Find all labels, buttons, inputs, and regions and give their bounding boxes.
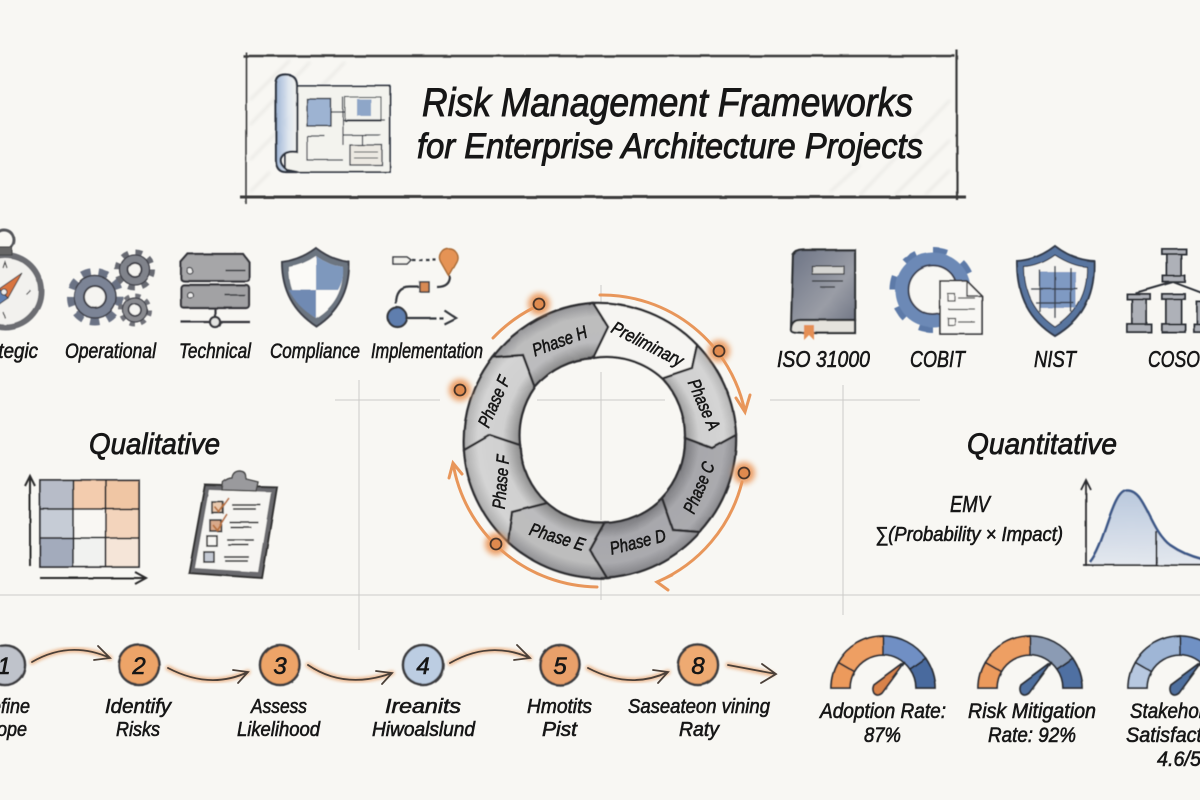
heading: Qualitative: Qualitative [89, 428, 220, 461]
distribution curve [1081, 480, 1200, 566]
gauge labels: Risk Mitigation [968, 700, 1096, 723]
title text [417, 81, 923, 166]
icon: checklist clipboard [189, 471, 277, 578]
step labels: Identify [105, 696, 172, 718]
phase labels: Phase D [608, 525, 668, 559]
orange cycle arrows [449, 295, 750, 590]
step arrows [32, 645, 776, 684]
icon: gears [71, 253, 152, 324]
phase labels: Phase C [679, 458, 719, 516]
gauge labels [818, 700, 1200, 771]
ring segments [464, 303, 736, 578]
gauge labels: Adoption Rate: [818, 700, 946, 723]
EMV formula: ∑(Probability × Impact) [875, 524, 1063, 546]
icon: server [181, 254, 250, 327]
step labels: Saseateon vining [628, 696, 770, 718]
icon: COSO pillars [1127, 249, 1200, 332]
category labels: Compliance [270, 340, 360, 363]
icon: compliance shield [282, 248, 349, 326]
phase labels: Phase E [527, 519, 588, 555]
heading: Quantitative: Quantitative [967, 428, 1117, 461]
step numbers [0, 653, 705, 680]
step labels: Raty [679, 719, 720, 741]
category labels: Implementation [371, 340, 483, 363]
gauge: stakeholder satisfaction [1128, 636, 1200, 695]
icon: ISO 31000 book [791, 250, 855, 340]
phase labels: Phase A [684, 376, 724, 433]
framework labels [777, 346, 1200, 372]
panel: risk categories [0, 230, 483, 363]
icon: blueprint [276, 75, 390, 172]
panel: qualitative methods [25, 428, 277, 584]
step labels: Risks [116, 719, 160, 741]
step labels: Hiwoalslund [372, 719, 476, 741]
gauge: adoption rate [831, 636, 935, 695]
step labels: Assess [250, 696, 307, 718]
step labels: Likelihood [237, 719, 321, 741]
gauge labels: 87% [864, 724, 901, 747]
gauge: risk mitigation rate [978, 636, 1082, 695]
icon: implementation route [388, 249, 458, 326]
step labels: Hmotits [527, 696, 592, 718]
chart: TOGAF ADM phase ring [449, 293, 755, 590]
icon: compass [0, 230, 41, 327]
framework labels: NIST [1034, 346, 1078, 372]
EMV formula [875, 491, 1063, 546]
panel: frameworks [777, 246, 1200, 372]
panel: KPI gauges [818, 636, 1200, 771]
category labels [0, 340, 483, 363]
EMV formula: EMV [950, 491, 992, 517]
step numbers: 2 [131, 653, 146, 680]
step numbers: 5 [553, 653, 567, 680]
step numbers: 3 [273, 653, 287, 680]
step labels: Pist [542, 719, 579, 741]
phase labels: Preliminary [608, 317, 688, 371]
panel: quantitative methods [875, 428, 1200, 566]
icon: COBIT gear and document [895, 252, 982, 334]
gauge labels: Rate: 92% [988, 724, 1076, 747]
title text: for Enterprise Architecture Projects [417, 127, 923, 166]
title text: Risk Management Frameworks [422, 81, 913, 125]
framework labels: ISO 31000 [777, 346, 870, 372]
orange milestones [449, 293, 755, 555]
category labels: Operational [65, 340, 157, 363]
step numbers: 4 [416, 653, 430, 680]
risk matrix [25, 476, 146, 584]
step numbers: 8 [691, 653, 705, 680]
phase labels: Phase F [474, 372, 515, 430]
category labels: Technical [179, 340, 252, 363]
step circles [0, 645, 718, 685]
title banner [240, 50, 966, 204]
step labels [0, 696, 770, 741]
step labels: Ireanits [385, 696, 461, 718]
icon: NIST shield [1017, 246, 1094, 336]
phase labels [474, 317, 724, 559]
phase labels: Phase F [489, 453, 513, 510]
panel: process steps [0, 645, 776, 741]
banner frame [240, 50, 966, 204]
framework labels: COBIT [910, 346, 967, 372]
phase labels: Phase H [529, 322, 591, 360]
